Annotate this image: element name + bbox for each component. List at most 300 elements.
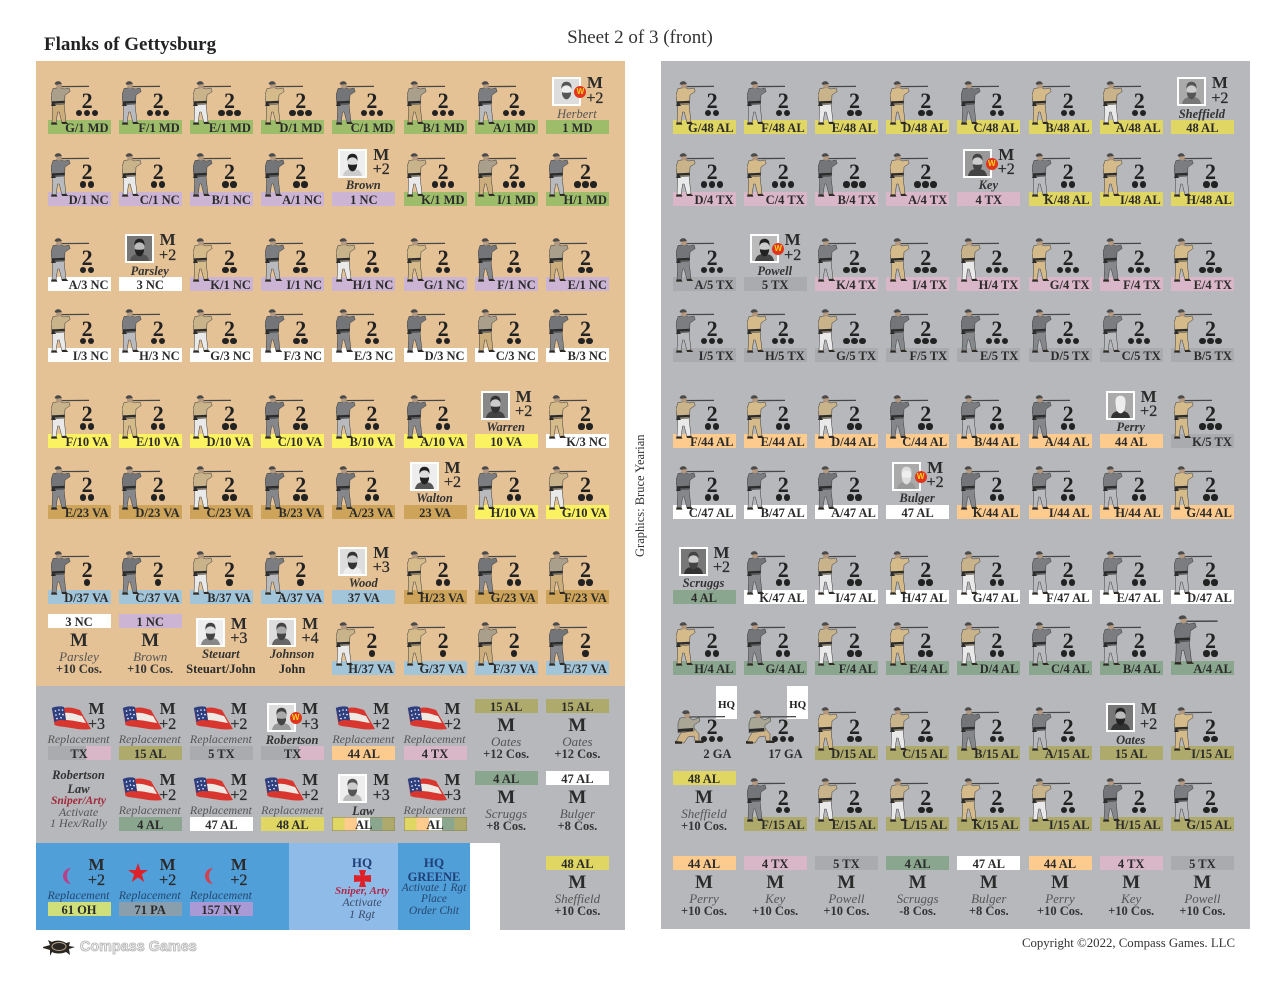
counter: C/4 TX [744,152,807,206]
counter: F/15 AL [744,777,807,831]
counter: E/48 AL [815,80,878,134]
marker: Powell +10 Cos. [815,856,878,918]
counter: 17 GA kneeling with HQ [744,706,807,760]
leader counter: Warren: Warren [486,420,525,434]
counter: I/15 AL: 2 [1063,785,1074,810]
counter: H/4 TX: 2 [991,245,1002,270]
counter: G/23 VA [475,550,538,604]
counter: F/5 TX [886,308,949,362]
marker: Key +10 Cos.: M [766,872,784,893]
marker: Perry +10 Cos.: Perry [689,890,719,906]
marker: Parsley +10 Cos. [48,614,110,676]
counter: E/15 AL: 2 [849,785,860,810]
counter: D/1 MD [261,81,324,134]
copyright: Copyright ©2022, Compass Games. LLC [1022,936,1235,950]
counter: F/5 TX: 2 [920,316,931,341]
counter: C/10 VA [261,395,324,448]
counter: F/4 TX: 2 [1134,245,1145,270]
leader counter: Herbert: W [577,87,584,96]
counter: B/5 TX [1171,308,1234,362]
counter: D/3 NC [404,309,467,362]
counter: K/47 AL: 2 [778,557,789,582]
replacement counter: 157 NY: +2 [230,872,247,888]
counter: F/15 AL: 2 [778,785,789,810]
icon: red cross [354,870,371,887]
counter: F/44 AL [672,394,736,448]
counter: G/4 TX [1028,237,1092,291]
counter: I/44 AL: 2 [1063,472,1074,497]
counter: A/4 AL: 2 [1205,628,1216,653]
counter: E/23 VA [48,464,110,518]
counter: B/15 AL [957,706,1020,760]
counter: F/4 AL: 2 [849,628,860,653]
counter: C/15 AL [886,706,949,760]
leader counter: Steuart [190,620,253,674]
counter: F/1 MD [119,81,182,134]
counter: D/1 MD: 2 [295,88,306,113]
counter: K/1 MD [404,153,467,206]
marker: Key +10 Cos.: Key [1121,890,1141,906]
counter: A/1 MD [475,81,538,134]
marker: Powell +10 Cos.: +10 Cos. [823,904,869,918]
counter: C/1 NC [119,153,182,206]
counter: E/4 TX [1171,237,1234,291]
panel: HQ sniper, arty: 1 Rgt [349,907,375,921]
counter: K/4 TX [815,237,878,291]
replacement counter: 48 AL: M [302,770,318,789]
counter: G/37 VA: 2 [438,628,449,653]
replacement counter: AL mixed +3: M [444,770,461,789]
counter: G/10 VA: 2 [580,472,591,497]
counter: K/3 NC [546,395,609,448]
leader counter: Key: W [988,158,996,168]
leader counter: Sheffield: Sheffield [1179,106,1225,120]
counter: I/15 AL [1171,706,1234,760]
marker: Sheffield +10 Cos.: +10 Cos. [554,904,600,918]
counter: G/1 MD: 2 [82,88,93,113]
marker: Parsley +10 Cos.: M [70,630,88,651]
leader counter: Powell: +2 [784,246,801,264]
leader counter: Law: M [373,770,389,789]
counter: K/1 NC [190,238,253,291]
leader counter: Brown: Brown [346,178,381,192]
marker: Scruggs -8 Cos.: Scruggs [897,890,939,906]
counter: D/48 AL: 2 [920,88,931,113]
counter: I/47 AL [815,550,878,604]
marker: Bulger +8 Cos.: Bulger [560,806,595,820]
leader counter: Key [957,152,1020,206]
leader counter: Sheffield: M [1212,73,1228,92]
marker: Scruggs -8 Cos. [886,856,949,918]
leader counter: Key: +2 [998,161,1015,178]
counter: 2 GA kneeling with HQ: 2 [707,714,718,739]
counter: A/10 VA: 2 [438,401,449,426]
counter: A/5 TX: 2 [707,245,718,270]
counter: I/48 AL [1100,152,1163,206]
counter: E/4 TX: 2 [1205,245,1216,270]
counter: D/3 NC: 2 [438,316,449,341]
counter: G/1 NC: 2 [438,245,449,270]
counter: G/15 AL [1171,777,1234,831]
marker: Perry +10 Cos.: Perry [1045,890,1075,906]
counter: I/3 NC: 2 [82,316,93,341]
leader counter: Wood: Wood [349,576,378,590]
replacement counter: 61 OH: M [88,855,105,874]
leader counter: Walton: M [444,458,461,476]
replacement counter: 5 TX [190,706,253,760]
counter: I/15 AL: 2 [1205,714,1216,739]
replacement counter: 5 TX: +2 [230,716,247,732]
panel: HQ Greene [398,843,470,930]
marker: Scruggs +8 Cos.: M [497,787,515,808]
counter: 17 GA kneeling with HQ: 2 [778,714,789,739]
counter: E/10 VA: 2 [153,401,164,426]
marker: Sheffield +10 Cos.: M [695,787,713,808]
marker: Powell +10 Cos. [1171,856,1234,918]
counter: B/23 VA: 2 [295,472,306,497]
counter: G/5 TX [815,308,878,362]
counter: H/23 VA [404,550,466,604]
counter: D/4 TX [672,152,736,206]
counter: H/47 AL [886,550,949,604]
counter: I/1 MD: 2 [509,159,520,184]
panel: HQ Greene: Place [421,893,447,905]
counter: F/23 VA [546,550,609,604]
counter: A/15 AL [1028,706,1092,760]
counter: G/1 MD [48,81,111,134]
counter: H/15 AL: 2 [1134,785,1145,810]
counter: E/48 AL: 2 [849,88,860,113]
marker: Perry +10 Cos.: M [1051,872,1069,893]
marker: Bulger +8 Cos.: +8 Cos. [969,904,1009,918]
counter: A/4 AL [1171,620,1234,674]
replacement counter: AL mixed +3 [404,777,466,831]
counter: I/5 TX [672,308,736,362]
counter: D/23 VA [119,464,182,518]
counter: G/44 AL: 2 [1205,472,1216,497]
counter: G/4 TX: 2 [1063,245,1074,270]
replacement counter: TX +3: M [88,699,105,718]
leader counter: Oates [1100,706,1163,760]
counter: F/37 VA [475,620,538,674]
replacement counter: 71 PA: +2 [159,872,176,888]
counter: B/47 AL: 2 [778,472,789,497]
counter: D/47 AL: 2 [1205,557,1216,582]
text block: Robertson Law sniper/arty: 1 Hex/Rally [50,816,107,830]
replacement counter: 15 AL: M [160,699,176,718]
leader counter: Steuart: +3 [230,630,247,647]
counter: E/4 AL: 2 [920,628,931,653]
counter: D/5 TX: 2 [1063,316,1074,341]
counter: L/15 AL [886,777,949,831]
panel: Confederate gray counters: HQ [718,699,735,711]
marker: Bulger +8 Cos.: M [568,787,586,808]
counter: A/4 TX [886,152,949,206]
counter: K/5 TX: 2 [1205,401,1216,426]
leader counter: Warren: +2 [515,403,532,420]
panel: HQ sniper, arty [289,843,398,930]
marker: Scruggs +8 Cos.: Scruggs [485,806,527,820]
counter: B/5 TX: 2 [1205,316,1216,341]
leader counter: Steuart: M [231,614,247,632]
counter: E/44 AL: 2 [778,401,789,426]
counter: A/44 AL: 2 [1063,401,1074,426]
marker: Brown +10 Cos.: M [141,630,159,651]
icon: turtle [42,934,76,959]
panel: HQ Greene: HQ [424,855,444,870]
marker: Parsley +10 Cos.: +10 Cos. [56,662,102,676]
counter: D/37 VA [48,550,110,604]
counter: E/44 AL [744,394,807,448]
leader counter: Brown: M [373,144,389,164]
marker: Oates +12 Cos. [475,699,538,761]
counter: G/37 VA [404,620,466,674]
counter: A/47 AL: 2 [849,472,860,497]
counter: K/1 NC: 2 [224,245,235,270]
replacement counter: 71 PA: Replacement [119,888,181,902]
counter: E/1 MD: 2 [224,88,235,113]
counter: B/23 VA [261,464,324,518]
counter: G/47 AL [957,550,1020,604]
counter: F/4 AL [815,620,878,674]
leader counter: Scruggs: +2 [713,559,730,576]
leader counter: Bulger: M [927,458,943,476]
counter: F/4 TX [1100,237,1163,291]
counter: C/5 TX [1100,308,1163,362]
leader counter: Walton [404,464,466,518]
leader counter: Oates: Oates [1116,732,1145,746]
counter: K/47 AL [744,550,807,604]
replacement counter: AL mixed +3: +3 [444,786,461,804]
counter: H/47 AL: 2 [920,557,931,582]
counter: B/44 AL: 2 [991,401,1002,426]
replacement counter: 4 TX: Replacement [404,732,465,746]
counter: K/3 NC: 2 [580,401,591,426]
counter: E/1 MD [190,81,253,134]
counter: D/10 VA [190,395,253,448]
panel: HQ Greene: GREENE [408,870,460,884]
counter: D/4 AL [957,620,1020,674]
counter: G/23 VA: 2 [509,557,520,582]
replacement counter: AL mixed +3: Replacement [404,803,465,817]
counter: H/4 TX [957,237,1020,291]
counter: I/4 TX [886,237,949,291]
counter: B/3 NC [546,309,609,362]
counter: C/37 VA [119,550,182,604]
counter: E/4 AL [886,620,949,674]
counter: I/48 AL: 2 [1134,159,1145,184]
counter: D/15 AL: 2 [849,714,860,739]
panel: gray replacement counters [36,686,625,843]
counter: D/5 TX [1028,308,1092,362]
counter: F/1 NC [475,238,538,291]
replacement counter: 15 AL: Replacement [119,732,181,746]
marker: Powell +10 Cos.: M [1193,872,1211,893]
counter: I/47 AL: 2 [849,557,860,582]
counter: F/48 AL [744,80,807,134]
counter: G/47 AL: 2 [991,557,1002,582]
counter: C/37 VA: 2 [153,557,164,582]
leader counter: Johnson: +4 [302,630,319,647]
marker: Oates +12 Cos.: Oates [562,734,593,748]
counter: E/47 AL: 2 [1134,557,1145,582]
leader counter: Perry: +2 [1140,403,1157,420]
counter: B/10 VA: 2 [366,401,377,426]
counter: A/37 VA [261,550,324,604]
counter: B/4 TX: 2 [849,159,860,184]
panel: HQ Greene: Order Chit [409,905,459,917]
leader counter: Herbert: +2 [586,90,603,106]
panel: HQ sniper, arty: Sniper, Arty [335,885,389,897]
counter: G/4 AL: 2 [778,628,789,653]
replacement counter: 47 AL: Replacement [190,803,252,817]
marker: Sheffield +10 Cos.: +10 Cos. [681,818,727,832]
leader counter: Wood [332,550,395,604]
counter: B/15 AL: 2 [991,714,1002,739]
counter: E/37 VA: 2 [580,628,591,653]
leader counter: Scruggs [672,550,736,604]
replacement counter: 4 AL: M [160,770,176,789]
marker: Powell +10 Cos.: +10 Cos. [1179,904,1225,918]
marker: Key +10 Cos.: M [1122,872,1140,893]
counter: F/47 AL: 2 [1063,557,1074,582]
leader counter: Powell: Powell [757,264,792,278]
leader counter: Wood: M [373,542,389,562]
counter: C/3 NC: 2 [509,316,520,341]
leader counter: Walton: Walton [416,491,453,505]
counter: E/3 NC: 2 [366,316,377,341]
counter: G/44 AL [1171,464,1234,518]
counter: F/37 VA: 2 [509,628,520,653]
marker: Powell +10 Cos.: Powell [1184,890,1220,906]
counter: D/23 VA: 2 [153,472,164,497]
counter: K/48 AL: 2 [1063,159,1074,184]
replacement counter: 4 TX [404,706,466,760]
leader counter: Oates: +2 [1140,716,1157,732]
leader counter: Sheffield: +2 [1211,90,1228,106]
text block: Robertson Law sniper/arty: Law [67,782,90,796]
leader counter: Warren: M [516,386,532,406]
replacement counter: 5 TX: M [231,699,247,718]
leader counter: Robertson: W [292,713,299,722]
leader counter: Johnson: Johnson [270,647,314,661]
counter: K/5 TX [1171,394,1234,448]
counter: A/10 VA [404,395,467,448]
leader counter: Sheffield [1171,80,1234,134]
logo: Compass Games: Compass Games [80,939,197,955]
counter: F/3 NC: 2 [295,316,306,341]
counter: D/37 VA: 2 [82,557,93,582]
marker: Oates +12 Cos.: M [568,715,586,736]
replacement counter: 44 AL [332,706,395,760]
marker: Parsley +10 Cos.: Parsley [59,648,99,664]
counter: K/1 MD: 2 [438,159,449,184]
replacement counter: TX +3: +3 [88,716,105,732]
counter: E/23 VA: 2 [82,472,93,497]
replacement counter: 157 NY [190,862,253,916]
replacement counter: 4 TX: M [444,699,461,718]
counter: A/15 AL: 2 [1063,714,1074,739]
text block: Robertson Law sniper/arty: Sniper/Arty [51,795,106,807]
leader counter: Herbert [546,73,609,134]
panel: Confederate gray counters [661,61,1250,929]
marker: Brown +10 Cos. [119,614,182,676]
marker: Oates +12 Cos.: M [497,715,515,736]
counter: C/44 AL [886,394,949,448]
counter: C/3 NC [475,309,538,362]
counter: K/15 AL [957,777,1020,831]
counter: G/48 AL: 2 [707,88,718,113]
panel: HQ sniper, arty: Activate [342,895,382,909]
counter: C/5 TX: 2 [1134,316,1145,341]
replacement counter: 4 AL [119,777,182,831]
counter: I/5 TX: 2 [707,316,718,341]
leader counter: Herbert: M [587,73,603,92]
counter: C/1 MD [332,81,395,134]
counter: A/23 VA [332,464,395,518]
counter: D/44 AL: 2 [849,401,860,426]
marker: Oates +12 Cos.: +12 Cos. [554,746,600,760]
counter: B/3 NC: 2 [580,316,591,341]
leader counter: Law [332,777,395,831]
marker: Powell +10 Cos.: M [837,872,855,893]
replacement counter: 44 AL: +2 [373,716,390,732]
replacement counter: 157 NY: Replacement [190,888,252,902]
counter: D/44 AL [815,394,878,448]
counter: G/3 NC [190,309,253,362]
counter: B/48 AL: 2 [1063,88,1074,113]
marker: Bulger +8 Cos.: +8 Cos. [558,818,597,832]
counter: D/4 AL: 2 [991,628,1002,653]
leader counter: Johnson [261,620,324,674]
counter: B/4 TX [815,152,878,206]
marker: Key +10 Cos.: +10 Cos. [752,904,798,918]
replacement counter: 44 AL: M [373,699,389,718]
marker: Sheffield +10 Cos. [546,856,609,918]
leader counter: Robertson [261,706,324,760]
panel: HQ Greene: Activate 1 Rgt [402,882,466,894]
counter: A/47 AL [815,464,878,518]
counter: B/1 MD [404,81,467,134]
leader counter: Law: +3 [373,786,390,804]
leader counter: Robertson: M [302,699,318,718]
counter: K/4 TX: 2 [849,245,860,270]
marker: Key +10 Cos. [744,856,807,918]
counter: G/5 TX: 2 [849,316,860,341]
counter: H/15 AL [1100,777,1163,831]
replacement counter: 71 PA: M [160,855,176,874]
counter: C/10 VA: 2 [295,401,306,426]
counter: C/15 AL: 2 [920,714,931,739]
leader counter: Walton: +2 [444,474,461,491]
counter: F/3 NC [261,309,324,362]
counter: B/1 NC: 2 [224,159,235,184]
counter: H/10 VA [475,464,538,518]
counter: D/4 TX: 2 [707,159,718,184]
counter: C/47 AL: 2 [707,472,718,497]
logo: Compass Games [42,934,198,960]
leader counter: Johnson: John [279,662,305,676]
counter: I/15 AL [1028,777,1092,831]
counter: H/10 VA: 2 [509,472,520,497]
counter: C/1 NC: 2 [153,159,164,184]
counter: D/48 AL [886,80,949,134]
counter: A/37 VA: 2 [295,557,306,582]
counter: H/37 VA: 2 [366,628,377,653]
replacement counter: 48 AL: Replacement [261,803,323,817]
counter: F/10 VA: 2 [82,401,93,426]
counter: K/15 AL: 2 [991,785,1002,810]
